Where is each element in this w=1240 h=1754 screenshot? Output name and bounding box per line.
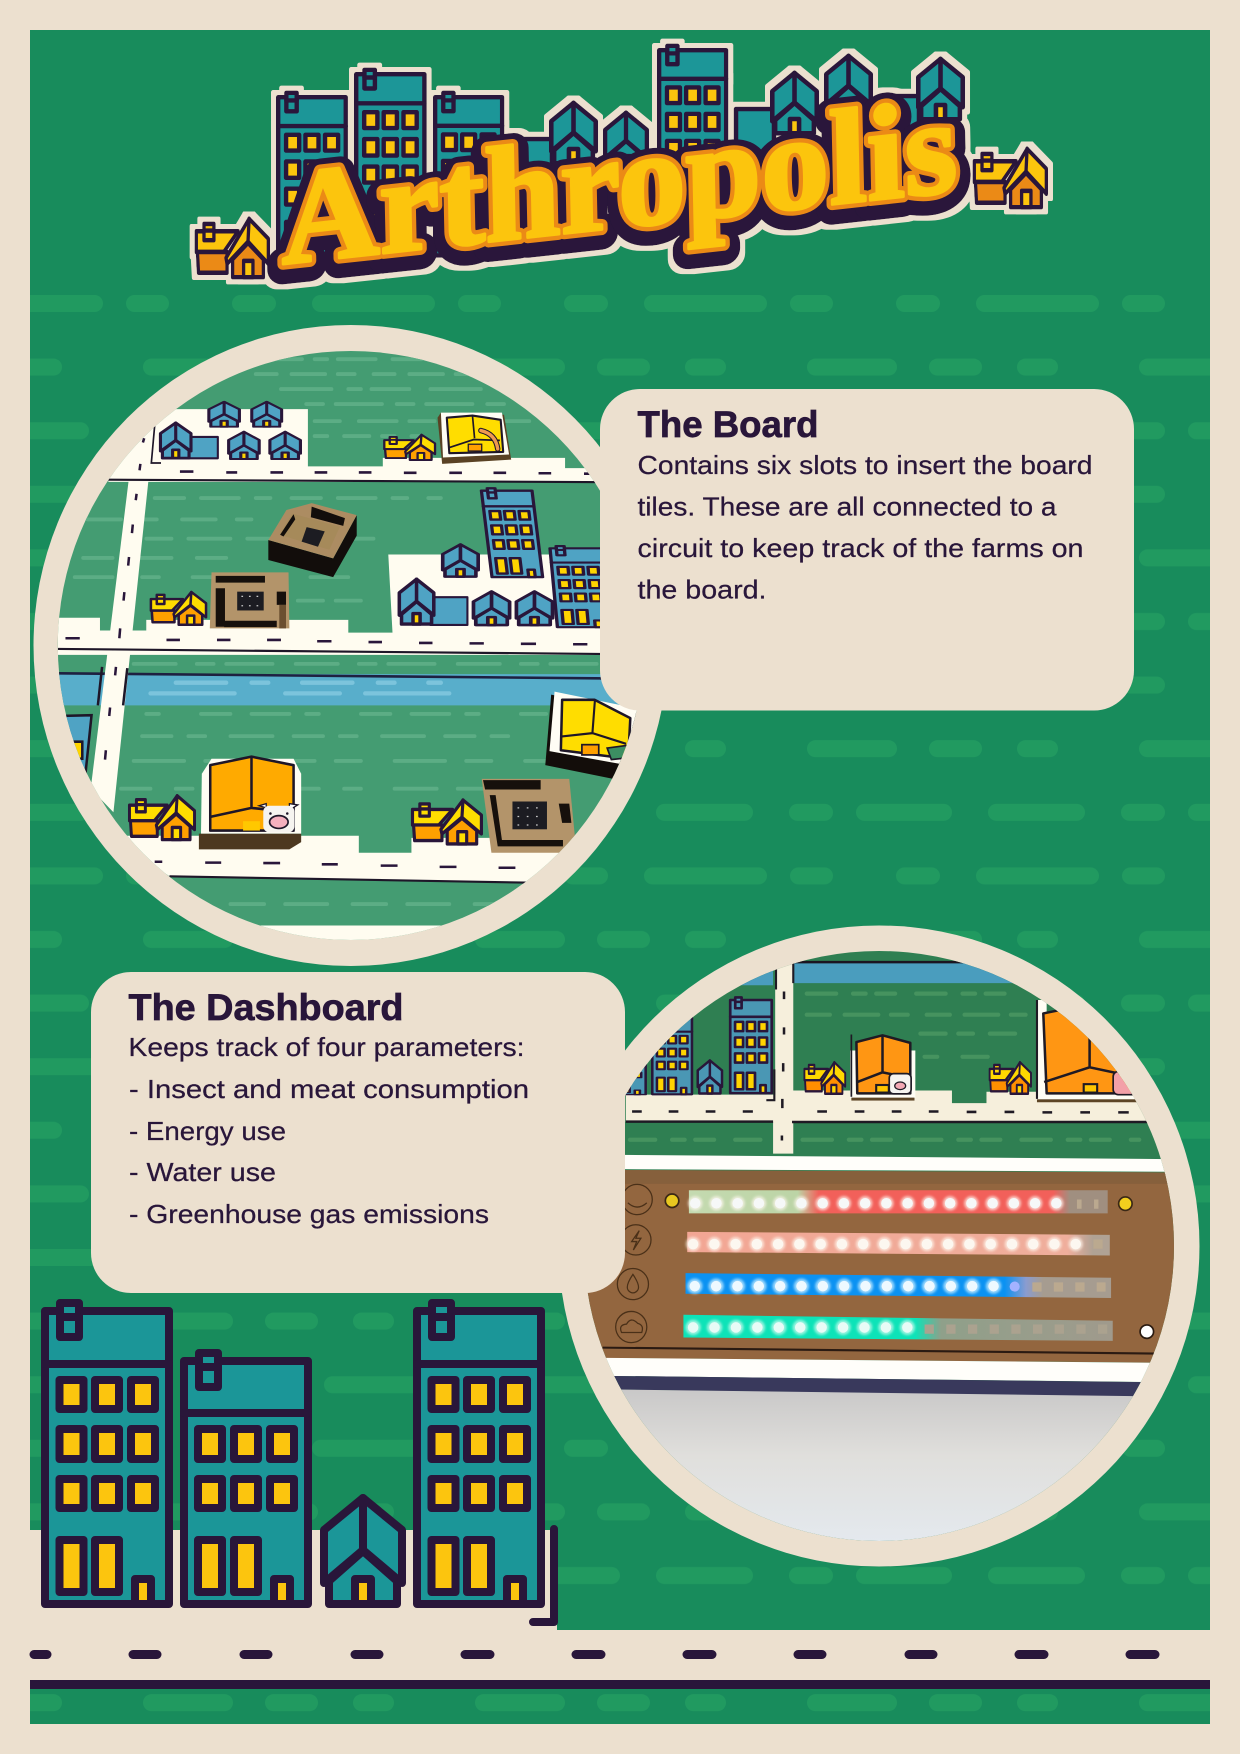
road and plots [626,962,1156,1154]
blue houses top plot [151,402,300,463]
road strip [30,1529,1210,1689]
board description [638,450,1092,604]
river [740,962,1013,986]
farm houses [129,435,481,844]
farm houses [804,1062,1031,1094]
logo [196,46,1046,298]
logo wordmark: Arthropolis [280,75,959,298]
logo skyline [278,46,963,257]
dashboard parameters list [128,1032,529,1229]
dashboard parameters list: Keeps track of four parameters: [128,1032,524,1062]
led bar 3: water use [686,1273,1111,1298]
tile with farm and pig [850,1034,915,1101]
white plots and roads [108,409,609,482]
insect farm tile top [438,413,511,464]
led bar 4: greenhouse gas emissions [683,1315,1113,1341]
text box: the board [600,389,1134,710]
tile with big farm [1037,1000,1139,1102]
empty slot 2 [482,779,576,853]
building 3 [417,1303,541,1604]
heading: the dashboard: The Dashboard [128,987,404,1028]
buttons [665,1194,1154,1338]
logo wordmark: Arthropolis [279,71,959,294]
led bar 1: insect and meat consumption [689,1190,1108,1213]
white board edge [622,1155,1169,1172]
street buildings [45,1303,541,1604]
board description: tiles. These are all connected to a [638,492,1057,522]
dashboard parameters list: - Energy use [129,1116,286,1146]
dashboard parameters list: - Water use [129,1157,276,1187]
blue buildings and houses right plot [399,488,610,627]
dashboard photo circle [550,920,1210,1580]
board description: the board. [638,574,766,604]
board description: circuit to keep track of the farms on [638,533,1084,563]
partial blue building left [66,714,93,774]
heading: the board: The Board [638,404,818,445]
tile with grasshopper [545,692,637,779]
tile with pig [199,757,301,849]
loose board tile with chip [268,503,357,577]
building 1 [45,1303,169,1604]
dashboard parameters list: - Greenhouse gas emissions [129,1199,489,1229]
dashboard parameters list: - Insect and meat consumption [129,1074,529,1104]
board photo circle [20,310,680,980]
logo farm right [974,149,1046,207]
small house [324,1498,402,1604]
text box: the dashboard [91,972,625,1293]
logo farm left [196,219,268,277]
blue buildings [606,997,774,1100]
background stripe pattern [30,290,1210,1724]
led bar 2: energy use [687,1232,1110,1255]
board description: Contains six slots to insert the board [638,450,1092,480]
building 2 [184,1353,308,1604]
wooden dashboard panel [575,1170,1177,1363]
logo wordmark: Arthropolis [279,71,959,294]
engraved icons [616,1184,652,1343]
river [59,674,620,706]
empty slot 1 [210,572,289,628]
